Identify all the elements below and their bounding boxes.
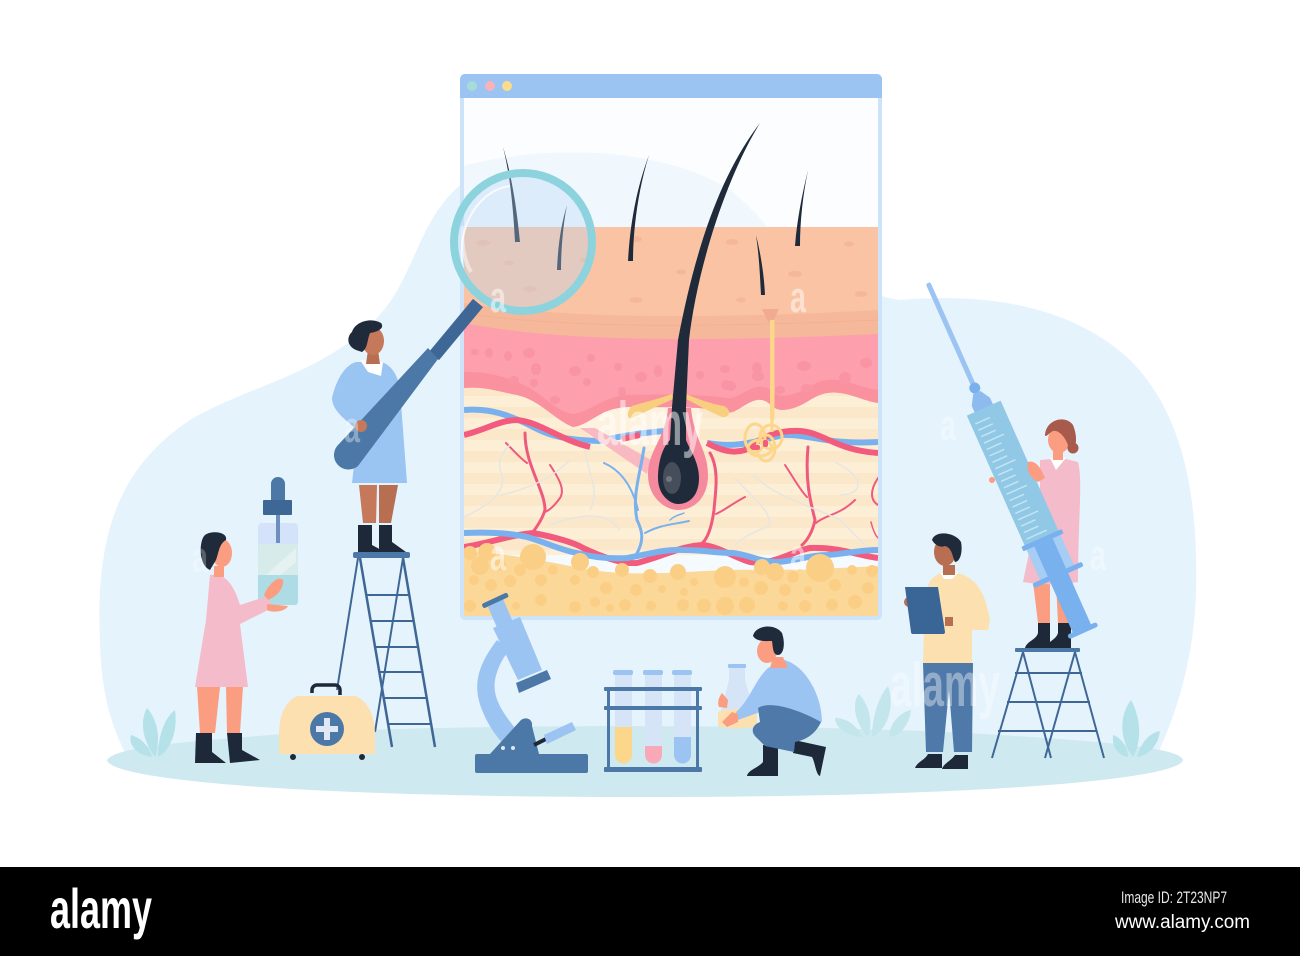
hair follicle pink sheath <box>648 408 708 510</box>
small watermark letters: a <box>490 273 506 322</box>
ground <box>107 726 1183 797</box>
skin cross-section <box>463 123 878 616</box>
graduation marks <box>975 415 1047 539</box>
neckline <box>1050 458 1066 470</box>
main hair <box>658 123 760 504</box>
stratum band <box>464 303 878 339</box>
lower barrel <box>1017 527 1084 588</box>
sweater <box>923 573 990 663</box>
dermis stripes <box>464 380 878 555</box>
legs and boots <box>358 485 406 552</box>
test tubes and rack <box>604 670 702 772</box>
head and hair <box>201 532 232 577</box>
small watermark letters: a <box>790 531 806 580</box>
woman with bottle <box>195 477 298 763</box>
right watermark: alamy <box>890 651 1000 720</box>
plant: right <box>1113 700 1160 757</box>
lens ring <box>454 173 592 311</box>
hands <box>718 693 738 727</box>
center watermark: alamy <box>597 390 703 459</box>
fat layer <box>463 543 878 616</box>
man with clipboard <box>904 533 990 769</box>
blue capillaries <box>604 448 689 555</box>
gland highlight patch <box>578 407 700 445</box>
small watermark letters: a <box>192 533 208 582</box>
sebaceous glands <box>628 394 729 418</box>
collar <box>940 573 958 579</box>
small hairs <box>503 147 808 295</box>
dress <box>1023 458 1080 584</box>
front boot <box>747 745 778 776</box>
woman on ladder <box>332 320 438 747</box>
plant: left <box>130 708 176 757</box>
alamy logo: alamy <box>50 877 152 940</box>
stool <box>992 648 1104 758</box>
serum bottle <box>258 477 298 605</box>
browser window panel <box>460 74 882 620</box>
image id: Image ID: 2T23NP7 <box>1121 888 1227 907</box>
collar <box>360 360 383 376</box>
dress <box>195 575 272 687</box>
window frame <box>460 74 882 620</box>
woman with syringe <box>903 272 1108 758</box>
hands <box>264 579 288 612</box>
magnifying glass <box>434 173 592 356</box>
hands <box>989 462 1045 483</box>
website: www.alamy.com <box>1114 912 1250 933</box>
pale gland band <box>580 428 651 474</box>
microscope <box>475 592 588 773</box>
plant: middle <box>835 686 911 737</box>
needle <box>926 282 976 386</box>
trousers <box>753 705 821 752</box>
red capillaries <box>506 433 878 545</box>
head and hair <box>753 627 788 668</box>
head and hair <box>1045 419 1078 460</box>
pink lower band <box>464 372 878 427</box>
objective band <box>516 670 551 693</box>
legs and boots <box>1025 582 1071 648</box>
stand <box>490 718 539 754</box>
ladder <box>337 552 435 747</box>
head <box>932 533 962 575</box>
background blob <box>99 152 1196 770</box>
small watermark letters: a <box>940 401 956 450</box>
small watermark letters: a <box>490 531 506 580</box>
rack <box>604 687 702 772</box>
pink cell dots <box>471 348 872 404</box>
torso and arm <box>736 660 822 722</box>
trousers <box>923 663 973 752</box>
upper blue vessel <box>464 410 878 445</box>
upper red vessel <box>464 420 878 453</box>
epidermis layer <box>464 227 878 316</box>
back boot <box>793 740 826 776</box>
title bar <box>460 74 882 98</box>
lens <box>455 174 591 310</box>
faint grey nerves <box>464 445 865 545</box>
pink dermis layer <box>464 323 878 427</box>
small watermark letters: a <box>790 273 806 322</box>
lab coat <box>332 362 407 483</box>
legs and boots <box>195 687 260 763</box>
head <box>348 320 384 364</box>
footer bar <box>0 867 1300 956</box>
eyepiece cap <box>481 592 509 609</box>
small watermark letters: a <box>1090 531 1106 580</box>
lower vessels <box>464 533 878 563</box>
magnifier grip <box>334 348 438 470</box>
focus knob <box>501 722 576 750</box>
crouching man with flask <box>718 627 826 776</box>
small watermark letters <box>192 273 1106 582</box>
magnifier handle <box>434 303 478 356</box>
shoes <box>915 754 968 769</box>
alamy watermarks <box>192 273 1106 720</box>
clipboard <box>904 587 953 634</box>
sweat gland duct <box>745 309 782 461</box>
small watermark letters: a <box>344 403 360 452</box>
base <box>475 754 588 773</box>
first aid kit <box>279 685 375 760</box>
tube <box>488 599 542 680</box>
tubes <box>613 670 692 764</box>
skin pores <box>630 236 867 303</box>
hair bulb highlight <box>663 462 681 494</box>
hand <box>355 420 367 432</box>
arm <box>477 640 518 745</box>
flask <box>718 664 757 728</box>
syringe <box>903 272 1108 644</box>
hub and nozzle <box>963 379 996 420</box>
barrel <box>967 401 1060 548</box>
plunger <box>1029 536 1098 639</box>
